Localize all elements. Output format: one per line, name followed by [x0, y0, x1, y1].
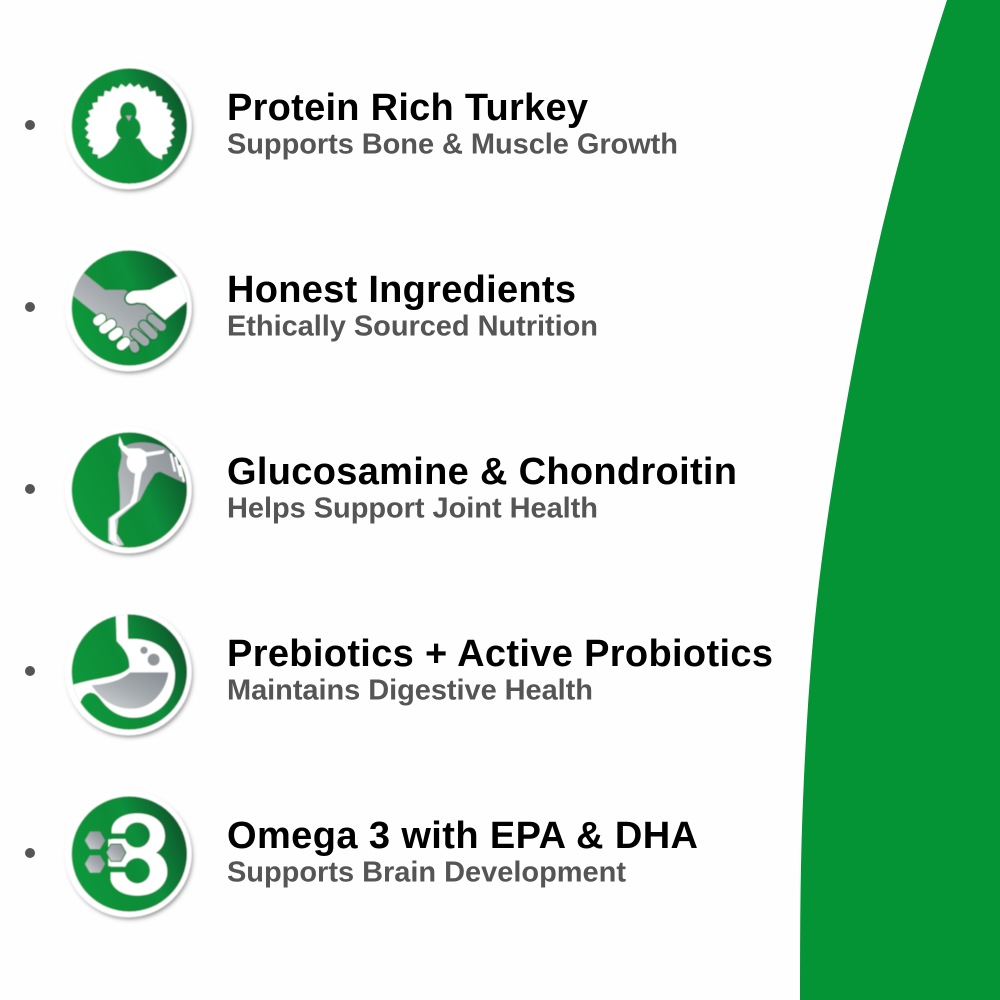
icon: turkey [65, 63, 192, 191]
icon: handshake [65, 245, 192, 373]
bullet 1 [25, 120, 35, 130]
green curved panel [800, 0, 1000, 1000]
subheading 2: Ethically Sourced Nutrition [227, 310, 598, 342]
icon: omega 3 [65, 791, 192, 919]
heading 5: Omega 3 with EPA & DHA [227, 815, 698, 857]
row 5: omega 3 [25, 791, 698, 919]
subheading 5: Supports Brain Development [227, 856, 626, 888]
bullet 4 [25, 666, 35, 676]
icon: stomach [63, 609, 192, 737]
heading 3: Glucosamine & Chondroitin [227, 451, 737, 493]
bullet 2 [25, 302, 35, 312]
subheading 1: Supports Bone & Muscle Growth [227, 128, 678, 160]
icon: horse leg joint [65, 427, 192, 555]
subheading 4: Maintains Digestive Health [227, 674, 593, 706]
bullet 5 [25, 848, 35, 858]
row 3: glucosamine and chondroitin [25, 427, 737, 555]
heading 1: Protein Rich Turkey [227, 87, 588, 129]
row 1: protein rich turkey [25, 63, 678, 191]
heading 2: Honest Ingredients [227, 269, 576, 311]
heading 4: Prebiotics + Active Probiotics [227, 633, 773, 675]
subheading 3: Helps Support Joint Health [227, 492, 598, 524]
row 4: prebiotics and probiotics [25, 609, 773, 737]
row 2: honest ingredients [25, 245, 598, 373]
bullet 3 [25, 484, 35, 494]
